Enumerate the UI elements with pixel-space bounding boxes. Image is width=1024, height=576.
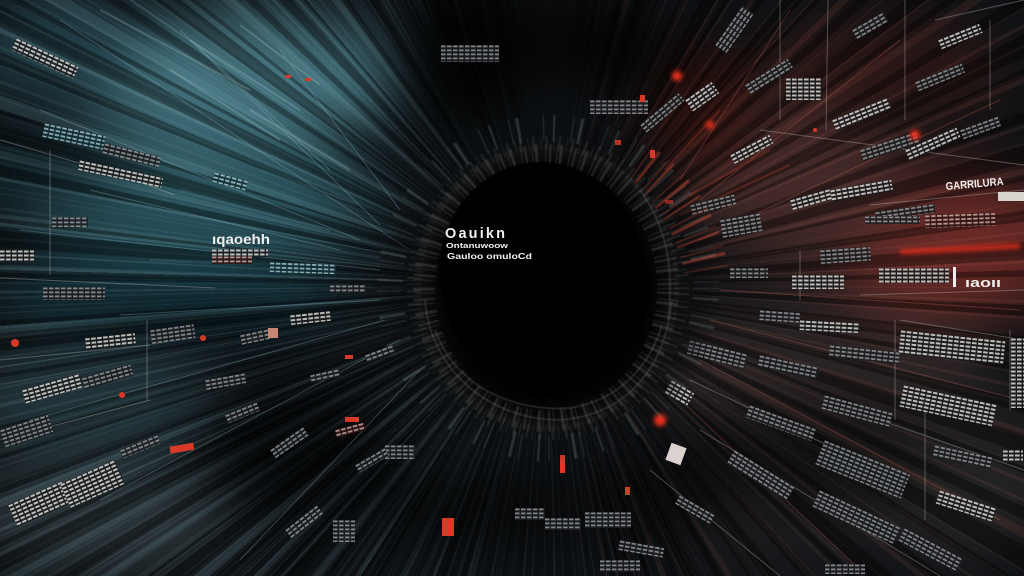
right headings: ıaoıı	[965, 275, 1001, 290]
text blocks: right panels	[515, 6, 1024, 574]
radial streaks: highlights, left side	[20, 10, 420, 560]
radial streak texture: teal, left side	[0, 0, 540, 576]
outer speck fringe	[390, 128, 706, 448]
black hole	[376, 118, 720, 462]
central title text: Ontanuwoow	[446, 243, 509, 250]
swirl ring strokes	[414, 143, 682, 433]
radial streak texture: red, right side	[556, 0, 1024, 576]
central title text	[445, 226, 532, 261]
central title text: Oauikn	[445, 226, 505, 242]
central title text: Gauloo omuloCd	[447, 251, 532, 261]
right headings: GARRILURA	[945, 176, 1004, 193]
red accents and glowing marks	[11, 71, 1020, 536]
left heading: ıqaoehh	[212, 231, 270, 247]
right headings	[945, 176, 1024, 290]
text blocks: left panels	[0, 38, 499, 542]
radial streak texture: bottom	[430, 405, 672, 576]
radial streaks: highlights, right side	[665, 10, 1020, 570]
